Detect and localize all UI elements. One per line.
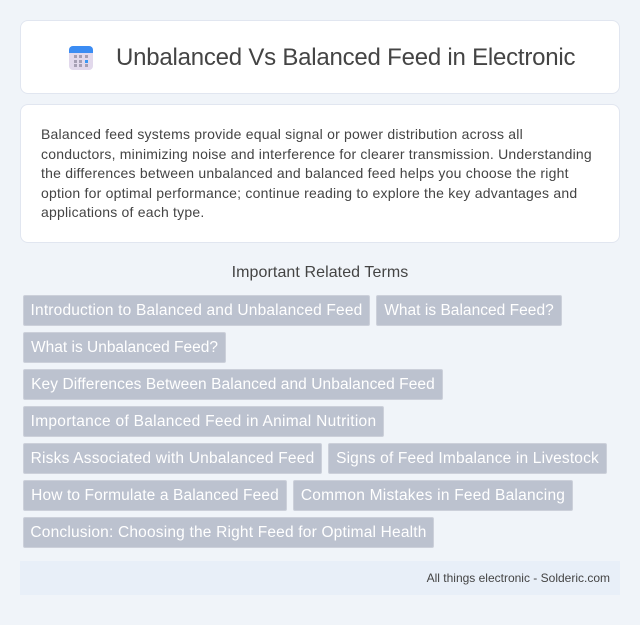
tag: What is Balanced Feed? (384, 302, 554, 319)
description text: Balanced feed systems provide equal signal or power distribution across all (41, 126, 523, 142)
tag: How to Formulate a Balanced Feed (31, 487, 279, 504)
title: Unbalanced Vs Balanced Feed in Electronic (116, 44, 575, 71)
section heading: Important Related Terms (232, 264, 408, 281)
tag (376, 295, 562, 326)
icon: calendar (69, 46, 93, 70)
tag list (23, 295, 607, 548)
description text (41, 126, 592, 220)
tag: Risks Associated with Unbalanced Feed (31, 450, 314, 467)
tag: Signs of Feed Imbalance in Livestock (336, 450, 599, 467)
tag (23, 369, 443, 400)
description text: the differences between unbalanced and balanced feed helps you choose the right (41, 165, 569, 181)
footer text: All things electronic - Solderic.com (427, 571, 610, 585)
description card (20, 104, 620, 243)
description text: option for optimal performance; continue reading to explore the key advantages and (41, 185, 577, 201)
tag: What is Unbalanced Feed? (31, 339, 218, 356)
tag (23, 480, 287, 511)
tag: Key Differences Between Balanced and Unbalanced Feed (31, 376, 435, 393)
tag (328, 443, 607, 474)
tag (23, 295, 370, 326)
tag (293, 480, 573, 511)
header card (20, 20, 620, 94)
description text: applications of each type. (41, 204, 204, 220)
description text: conductors, minimizing noise and interference for clearer transmission. Understanding (41, 146, 592, 162)
tag (23, 517, 434, 548)
tag (23, 406, 384, 437)
tag: Conclusion: Choosing the Right Feed for Optimal Health (30, 524, 427, 541)
tag: Importance of Balanced Feed in Animal Nutrition (31, 413, 376, 430)
tag (23, 332, 226, 363)
tag: Introduction to Balanced and Unbalanced Feed (31, 302, 362, 319)
footer bar (20, 561, 620, 595)
tag: Common Mistakes in Feed Balancing (301, 487, 565, 504)
tag (23, 443, 322, 474)
